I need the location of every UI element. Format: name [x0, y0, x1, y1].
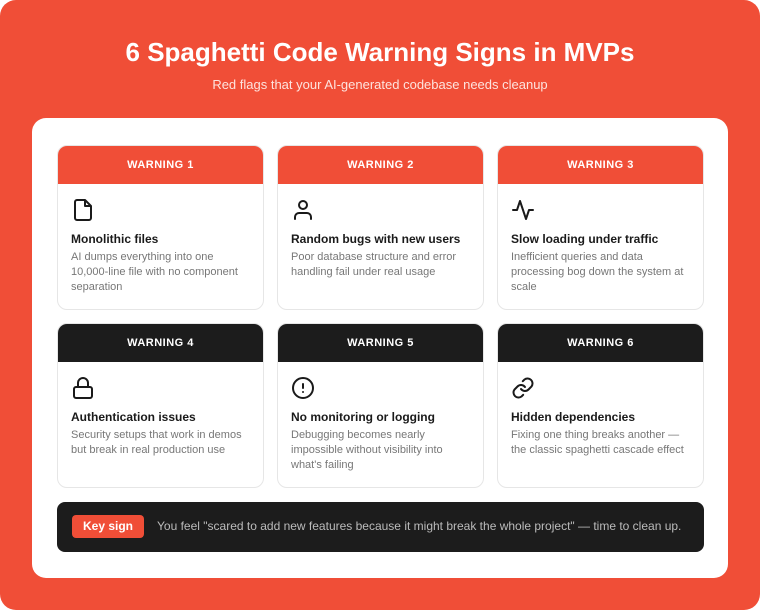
- card: warning 2: Poor database structure and error handling fail under real usage: [291, 251, 456, 278]
- card: warning 1: WARNING 1: [127, 159, 194, 171]
- card: warning 5: [277, 323, 484, 488]
- card: warning 5: WARNING 5: [347, 337, 414, 349]
- card: warning 1: Monolithic files: [71, 232, 158, 246]
- card: warning 1: AI dumps everything into one 10,000-line file with no component separation: [71, 251, 238, 293]
- card: warning 5: Debugging becomes nearly impossible without visibility into what's failing: [291, 429, 443, 471]
- callout: key sign: [57, 502, 704, 552]
- panel: main: [32, 118, 728, 578]
- callout: key sign: Key sign: [83, 519, 133, 533]
- card: warning 3: Inefficient queries and data processing bog down the system at scale: [511, 251, 683, 293]
- card: warning 6: Hidden dependencies: [511, 410, 635, 424]
- card: warning 6: WARNING 6: [567, 337, 634, 349]
- card: warning 6: Fixing one thing breaks another — the classic spaghetti cascade effect: [511, 429, 684, 456]
- card: warning 6: [497, 323, 704, 488]
- icon: user: [294, 200, 312, 220]
- icon: activity: [512, 200, 534, 220]
- card: warning 2: [277, 145, 484, 310]
- card: warning 3: WARNING 3: [567, 159, 634, 171]
- card: warning 2: Random bugs with new users: [291, 232, 460, 246]
- title: 6 Spaghetti Code Warning Signs in MVPs: [126, 37, 634, 67]
- card: warning 4: WARNING 4: [127, 337, 194, 349]
- card: warning 1: [57, 145, 264, 310]
- callout: key sign: You feel "scared to add new features because it might break the whole project" — time to clean up.: [157, 519, 681, 533]
- card: warning 5: No monitoring or logging: [291, 410, 435, 424]
- icon: lock: [73, 377, 93, 399]
- card: warning 3: [497, 145, 704, 310]
- card: warning 4: [57, 323, 264, 488]
- icon: link: [512, 378, 534, 398]
- card: warning 4: Security setups that work in demos but break in real production use: [71, 429, 242, 456]
- icon: alert: [292, 377, 314, 399]
- card: warning 4: Authentication issues: [71, 410, 196, 424]
- icon: file: [74, 199, 92, 221]
- card: warning 2: WARNING 2: [347, 159, 414, 171]
- subtitle: Red flags that your AI-generated codebase needs cleanup: [212, 77, 548, 92]
- card: warning 3: Slow loading under traffic: [511, 232, 658, 246]
